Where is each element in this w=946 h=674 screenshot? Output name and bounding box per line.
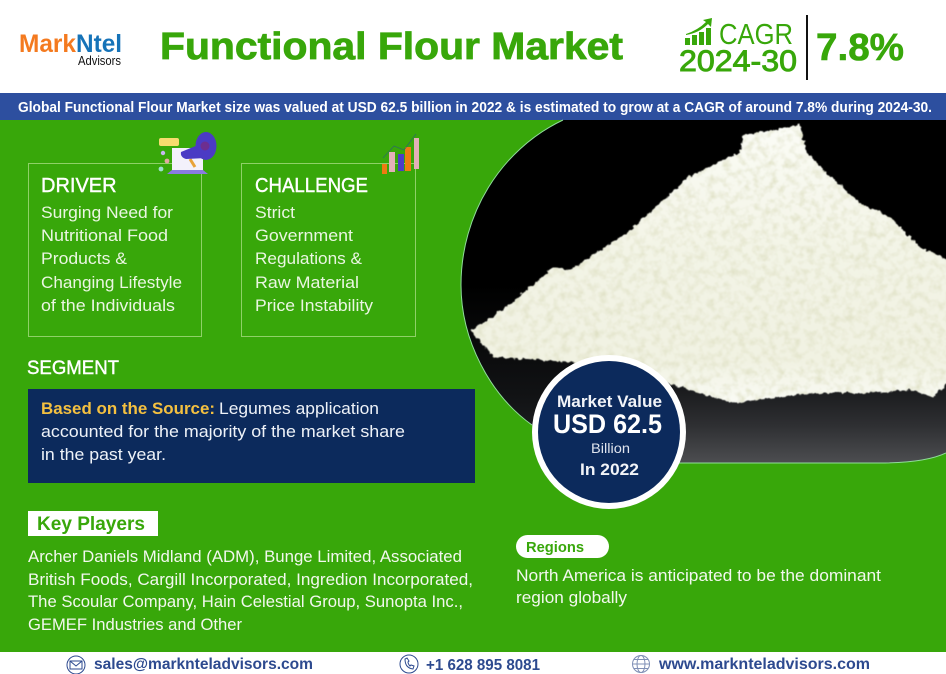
key players label: Key Players	[37, 514, 145, 535]
regions label	[516, 535, 609, 558]
regions label: Regions	[526, 540, 584, 556]
panel: key players	[28, 511, 473, 634]
driver text: Nutritional Food	[41, 226, 168, 245]
challenge text: Government	[255, 226, 353, 245]
logo: MarkNtel Advisors: Ntel	[76, 30, 122, 58]
panel: driver	[28, 132, 216, 336]
CAGR label: CAGR	[719, 19, 793, 51]
callout: market value: In 2022	[580, 461, 639, 479]
segment text: in the past year.	[41, 445, 166, 464]
icon: phone	[400, 655, 418, 673]
key players text: Archer Daniels Midland (ADM), Bunge Limited, Associated	[28, 547, 462, 566]
driver text: of the Individuals	[41, 296, 175, 315]
footer: contact details	[0, 652, 946, 674]
segment text: Legumes application	[219, 399, 379, 418]
driver text: Changing Lifestyle	[41, 273, 182, 292]
key players text: The Scoular Company, Hain Celestial Group, Sunopta Inc.,	[28, 592, 463, 611]
regions text: North America is anticipated to be the dominant	[516, 566, 881, 585]
challenge text: Regulations &	[255, 249, 363, 268]
segment text: Based on the Source:	[41, 399, 215, 418]
photo: flour pile	[455, 120, 946, 465]
callout: market value: Market Value	[557, 393, 662, 411]
driver text: Products &	[41, 249, 128, 268]
photo outline	[461, 120, 946, 463]
segment text	[41, 399, 405, 464]
challenge text: Raw Material	[255, 273, 359, 292]
callout: market value	[532, 355, 686, 509]
icon: globe	[632, 656, 650, 672]
challenge text	[255, 203, 374, 315]
icon: bar chart	[382, 134, 419, 174]
phone: +1 628 895 8081	[426, 657, 540, 674]
panel: segment	[28, 389, 475, 483]
panel: regions	[516, 535, 881, 607]
key players text	[28, 547, 473, 634]
divider	[806, 15, 808, 80]
challenge text: Strict	[255, 203, 295, 222]
regions text	[516, 566, 881, 607]
challenge text: Price Instability	[255, 296, 374, 315]
key players text: GEMEF Industries and Other	[28, 615, 242, 634]
icon: megaphone and laptop	[159, 132, 216, 174]
banner: market summary	[0, 93, 946, 120]
logo: MarkNtel Advisors: Mark	[19, 30, 76, 58]
callout: market value: USD 62.5	[553, 409, 662, 439]
title: Functional Flour Market	[160, 26, 623, 68]
key players text: British Foods, Cargill Incorporated, Ingredion Incorporated,	[28, 570, 473, 589]
segment heading: SEGMENT	[27, 358, 119, 379]
driver text: Surging Need for	[41, 203, 173, 222]
CAGR period: 2024-30	[679, 45, 797, 78]
panel: challenge	[242, 134, 419, 336]
CAGR value: 7.8%	[816, 27, 904, 69]
CAGR block	[679, 15, 904, 80]
key players label	[28, 511, 158, 536]
icon: growth chart	[685, 18, 712, 45]
driver text	[41, 203, 182, 315]
icon: email	[67, 656, 85, 674]
logo: MarkNtel Advisors: Advisors	[78, 53, 121, 68]
regions text: region globally	[516, 588, 627, 607]
segment text: accounted for the majority of the market share	[41, 422, 405, 441]
website: www.marknteladvisors.com	[658, 656, 870, 673]
email: sales@marknteladvisors.com	[94, 656, 313, 673]
callout: market value: Billion	[591, 440, 630, 456]
logo: MarkNtel Advisors	[19, 30, 122, 68]
driver heading: DRIVER	[41, 175, 117, 197]
challenge heading: CHALLENGE	[255, 175, 368, 197]
background: green panel	[0, 120, 946, 652]
